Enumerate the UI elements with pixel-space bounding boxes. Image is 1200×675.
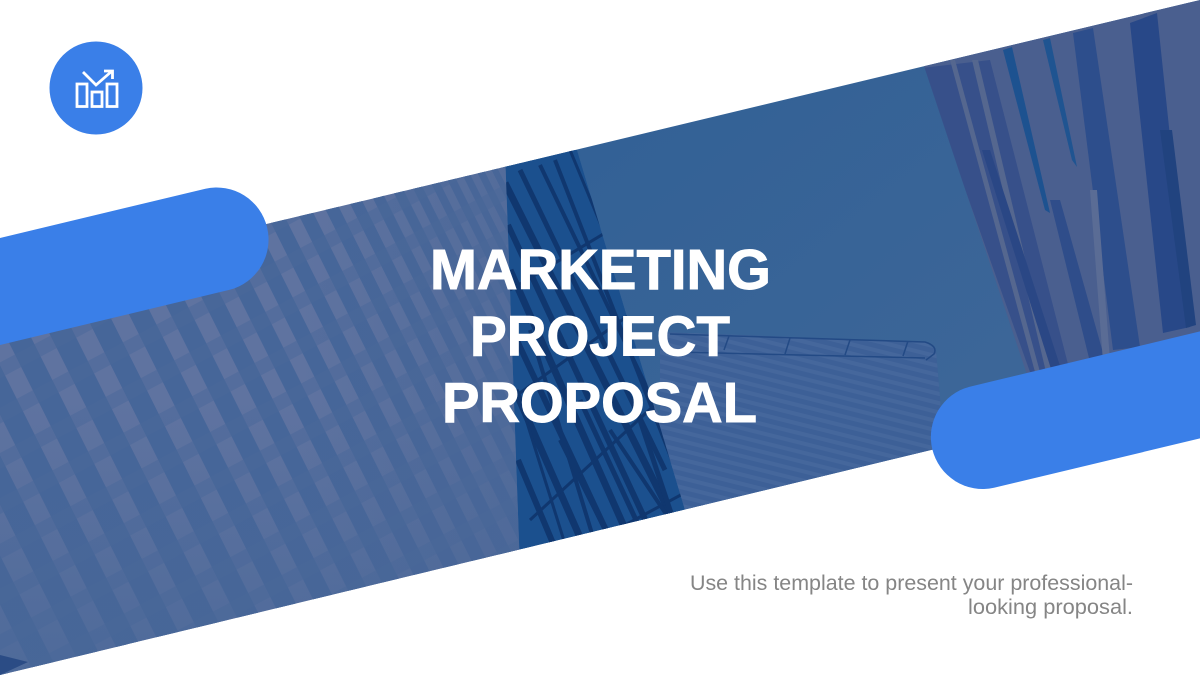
icon background circle [50,42,142,134]
title: PROPOSAL [442,371,757,435]
logo badge [50,42,142,134]
title [430,238,771,435]
subtitle [690,572,1133,619]
right blue pill [931,317,1200,489]
photo: central dark building [505,150,690,570]
photo: lower building [660,333,940,516]
title: MARKETING [430,238,771,302]
subtitle: looking proposal. [968,596,1133,619]
subtitle: Use this template to present your professional- [690,572,1133,595]
left blue pill [0,187,269,359]
photo: right facade [922,0,1200,390]
title: PROJECT [470,304,730,368]
photo: left facade [0,160,704,675]
photo: sky [500,0,1200,560]
icon: bar chart with rising arrow [77,71,117,106]
